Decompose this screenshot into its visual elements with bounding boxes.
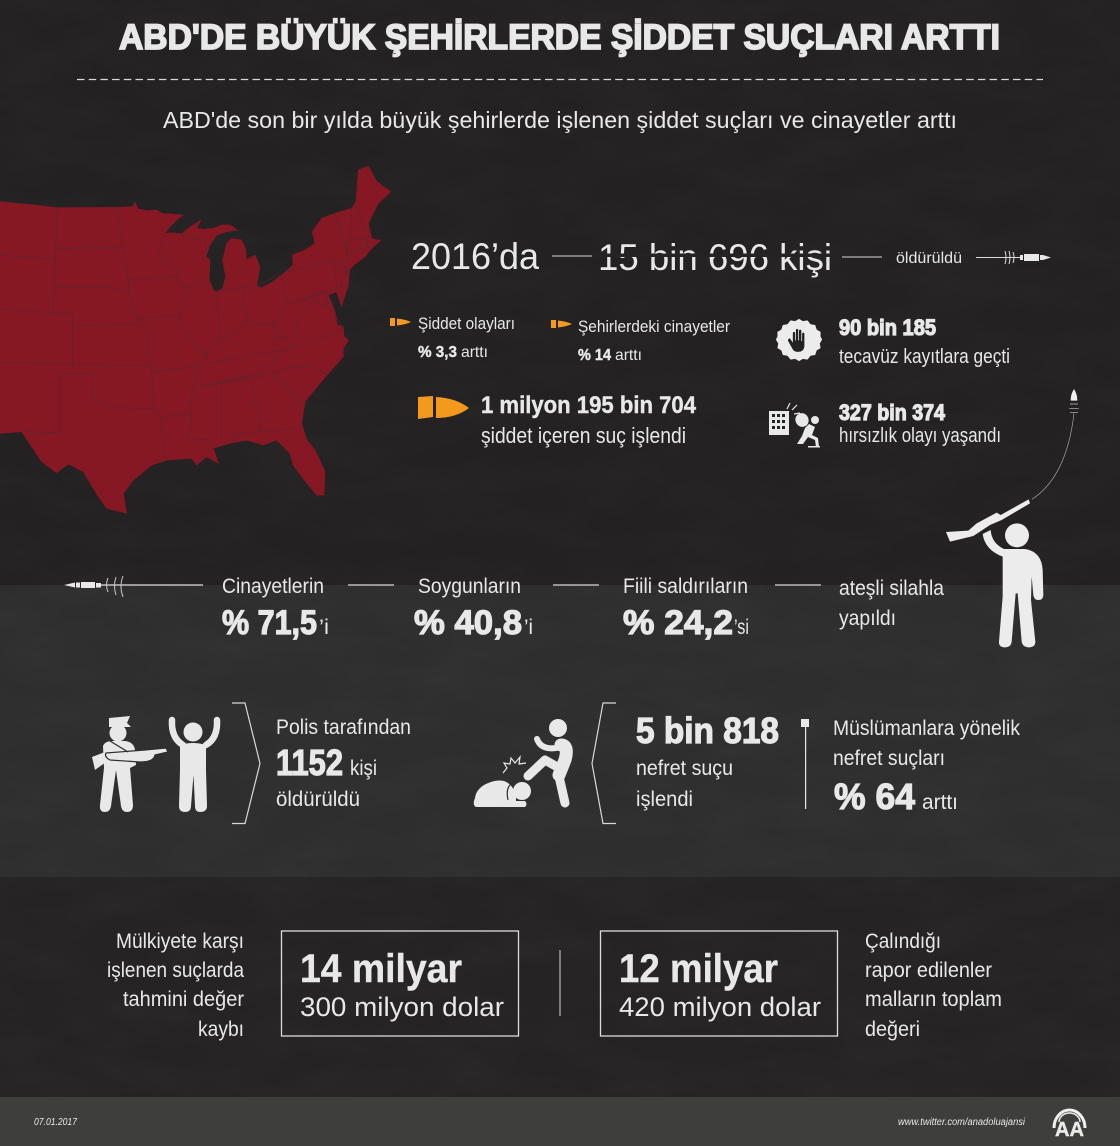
stat: urban murders: % 14 [578, 347, 611, 364]
stat: killed by police: kişi [350, 757, 377, 780]
text: property losses: tahmini değer [123, 988, 244, 1011]
stat: killed by police: 1152 [276, 742, 343, 783]
box: 14.3 billion: 300 milyon dolar [300, 992, 504, 1022]
stat: killed by police: Polis tarafından [276, 716, 411, 739]
stat: violent crimes: şiddet içeren suç işlendi [481, 423, 686, 448]
statistics row [64, 575, 944, 642]
footer: 07.01.2017 [34, 1117, 77, 1128]
text: stolen goods value: rapor edilenler [865, 959, 992, 982]
stat: murders: % 71,5 [222, 604, 317, 642]
headline: killed in 2016 [411, 236, 962, 278]
icon: AA logo [1054, 1110, 1085, 1141]
stat: burglary [769, 400, 1001, 448]
stat: rape: tecavüz kayıtlara geçti [839, 346, 1010, 368]
icon: man firing rifle upward [946, 389, 1079, 647]
stat: robberies: % 40,8 [414, 604, 522, 642]
stat: hate crimes: işlendi [636, 788, 693, 811]
stat: killed by police: öldürüldü [276, 788, 360, 811]
stat: violent incidents: Şiddet olayları [418, 314, 515, 333]
text: with firearms: yapıldı [839, 607, 896, 630]
icon: hand in badge [776, 319, 822, 361]
stat: robberies: ’i [524, 616, 533, 639]
stat: murders: Cinayetlerin [222, 575, 324, 598]
stat: urban murders [551, 317, 730, 364]
stat: urban murders: Şehirlerdeki cinayetler [578, 317, 730, 336]
text: property losses: işlenen suçlarda [107, 959, 244, 982]
headline: killed in 2016: öldürüldü [896, 250, 962, 267]
footer [34, 1110, 1085, 1141]
stat: violent crimes: 1 milyon 195 bin 704 [481, 392, 697, 419]
stat: burglary: 327 bin 374 [839, 400, 946, 425]
stat: hate crimes: 5 bin 818 [636, 710, 779, 751]
icon: bullet left [64, 576, 203, 597]
stat: hate crimes: nefret suçu [636, 757, 733, 780]
stat: violent incidents: arttı [461, 344, 488, 361]
stat: violent incidents: % 3,3 [418, 344, 457, 361]
text: stolen goods value [865, 930, 1002, 1041]
headline: killed in 2016: 15 bin 696 kişi [598, 237, 832, 278]
icon: large orange bullet [418, 396, 469, 419]
stat: anti-Muslim hate crimes: % 64 [834, 776, 915, 817]
box: 14.3 billion [282, 931, 518, 1036]
icon: bullet right [976, 251, 1051, 264]
bracket: hate crimes [592, 703, 616, 824]
stat: anti-Muslim hate crimes [833, 717, 1020, 817]
stat: rape: 90 bin 185 [839, 315, 936, 340]
headline: killed in 2016: 2016’da [411, 236, 539, 277]
text: stolen goods value: malların toplam [865, 988, 1002, 1011]
stat: murders [222, 575, 329, 642]
icon: AA logo: AA [1055, 1119, 1084, 1141]
title: ABD'DE BÜYÜK ŞEHİRLERDE ŞİDDET SUÇLARI ARTTI [119, 18, 1000, 57]
stat: robberies [414, 575, 533, 642]
stat: killed by police [276, 716, 411, 811]
stat: assaults [623, 575, 749, 642]
icon: police and victim [92, 716, 217, 812]
icon: burglar and building [769, 403, 820, 448]
stat: murders: ’i [319, 616, 329, 639]
text: property losses: kaybı [198, 1018, 244, 1041]
map: United States [0, 166, 391, 513]
stat: assaults: Fiili saldırıların [623, 575, 748, 598]
stat: anti-Muslim hate crimes: Müslümanlara yönelik [833, 717, 1020, 740]
text: property losses [107, 930, 244, 1041]
stat: violent incidents [390, 314, 515, 361]
stat: violent crimes [418, 392, 697, 448]
stat: burglary: hırsızlık olayı yaşandı [839, 425, 1001, 447]
stat: anti-Muslim hate crimes: nefret suçları [833, 747, 945, 770]
stat: assaults: % 24,2 [623, 604, 733, 642]
icon: small orange bullet [551, 320, 572, 328]
stat: robberies: Soygunların [418, 575, 521, 598]
stat: anti-Muslim hate crimes: arttı [922, 791, 958, 814]
text: property losses: Mülkiyete karşı [116, 930, 244, 953]
bracket: police [232, 703, 260, 824]
stat: hate crimes [636, 710, 779, 811]
icon: small orange bullet [390, 318, 411, 326]
box: 14.3 billion: 14 milyar [300, 947, 462, 991]
text: stolen goods value: Çalındığı [865, 930, 941, 953]
box: 12.42 billion: 420 milyon dolar [619, 992, 821, 1022]
box: 12.42 billion [600, 931, 838, 1036]
stat: assaults: ’si [734, 616, 749, 639]
icon: hate crime assault [474, 719, 567, 807]
text: stolen goods value: değeri [865, 1018, 920, 1041]
stat: urban murders: arttı [615, 347, 642, 364]
stat: rape [776, 315, 1010, 368]
divider with square [801, 719, 809, 809]
subtitle: ABD'de son bir yılda büyük şehirlerde işlenen şiddet suçları ve cinayetler arttı [163, 107, 957, 133]
box: 12.42 billion: 12 milyar [619, 947, 778, 991]
text: with firearms [839, 577, 944, 630]
text: with firearms: ateşli silahla [839, 577, 944, 600]
footer: www.twitter.com/anadoluajansi [898, 1117, 1026, 1128]
